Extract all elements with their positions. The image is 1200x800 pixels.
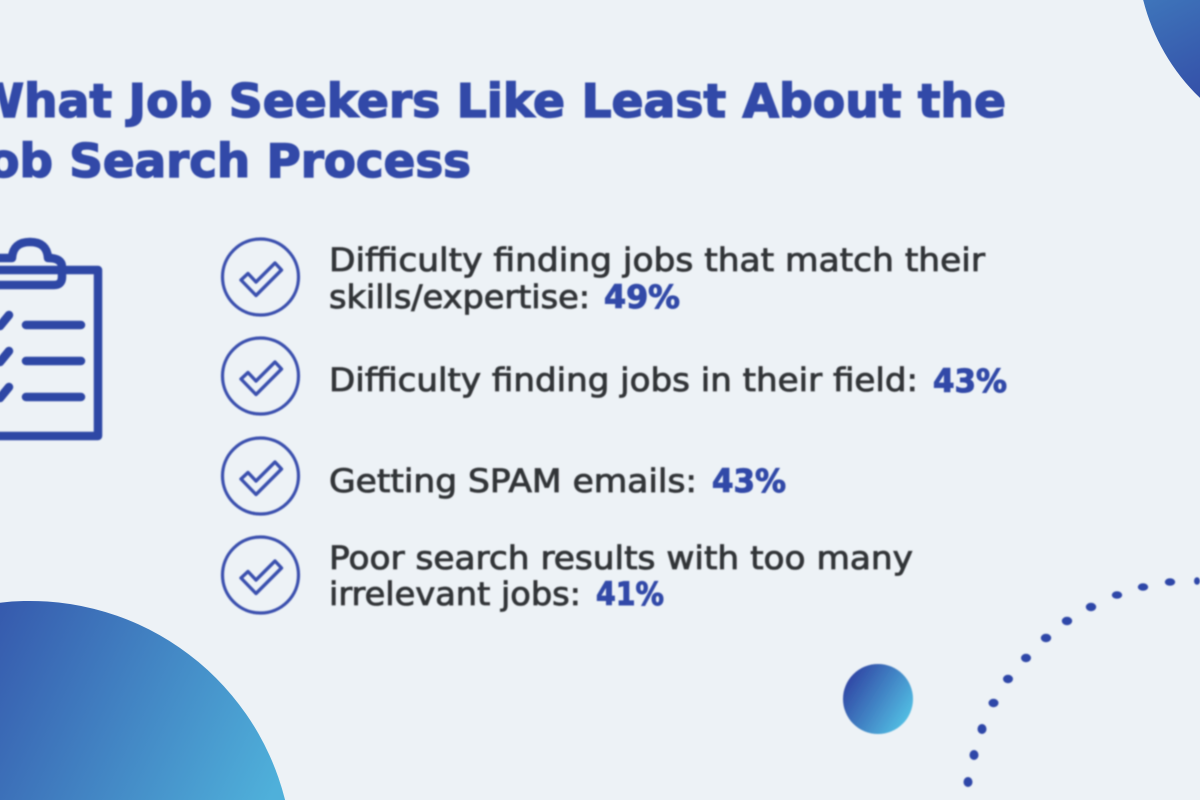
text: search results [329,539,913,613]
title: What Job Seekers Like Least About the [0,74,1006,128]
text: field: 43% [933,362,1007,400]
icon: clipboard checklist [0,242,98,436]
text: spam: Getting SPAM emails: [329,462,697,500]
icon: check circle 2 [222,338,298,414]
text: skills match [329,241,986,316]
text: skills match: skills/expertise: [329,278,590,316]
icon: check circle 4 [222,537,298,613]
text: search results: irrelevant jobs: [329,575,581,613]
decorative circle: top right [1143,0,1200,98]
list item: field [222,338,1007,414]
text: spam: 43% [712,462,786,500]
icon: check circle 3 [222,438,298,514]
title [0,74,1006,188]
list item: search results [222,537,913,613]
decorative dotted arc [964,577,1200,787]
list item: spam [222,438,786,514]
text: field: Difficulty finding jobs in their field: [329,361,918,399]
text: skills match: Difficulty finding jobs that match their [329,241,986,279]
text: search results: Poor search results with too many [329,539,913,577]
decorative circle: bottom left [0,601,285,800]
list item: skills match [222,239,986,316]
text: skills match: 49% [604,278,680,316]
decorative circle: small gradient [843,664,913,734]
text: search results: 41% [596,575,664,613]
icon: check circle 1 [222,239,298,315]
